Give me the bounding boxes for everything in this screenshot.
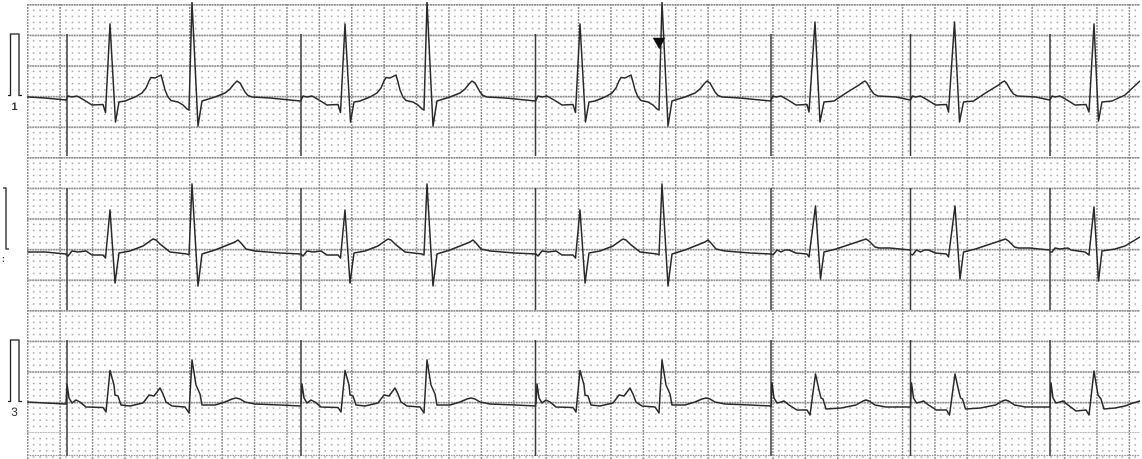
channel label 3: 3 (11, 405, 18, 419)
calibration pulse: channel 1 (8, 34, 22, 96)
pacing markers: channel 1 (67, 34, 1050, 156)
panel: channel 1 trace (8, 2, 1140, 156)
arrowhead marker (653, 38, 665, 49)
calibration pulse: channel 3 (8, 340, 22, 402)
pacing markers: channel 3 (67, 340, 1050, 456)
waveform: channel 2 (28, 184, 1140, 286)
pacing markers: channel 2 (67, 188, 1050, 310)
calibration pulse: channel 2 (3, 188, 9, 249)
waveform: channel 3 (28, 360, 1140, 415)
channel label 2 (clipped): : (2, 254, 5, 264)
panel: channel 3 trace (8, 340, 1140, 456)
channel label 1: 1 (11, 101, 18, 113)
panel: channel 2 trace (2, 184, 1140, 310)
waveform: channel 1 (28, 2, 1140, 126)
